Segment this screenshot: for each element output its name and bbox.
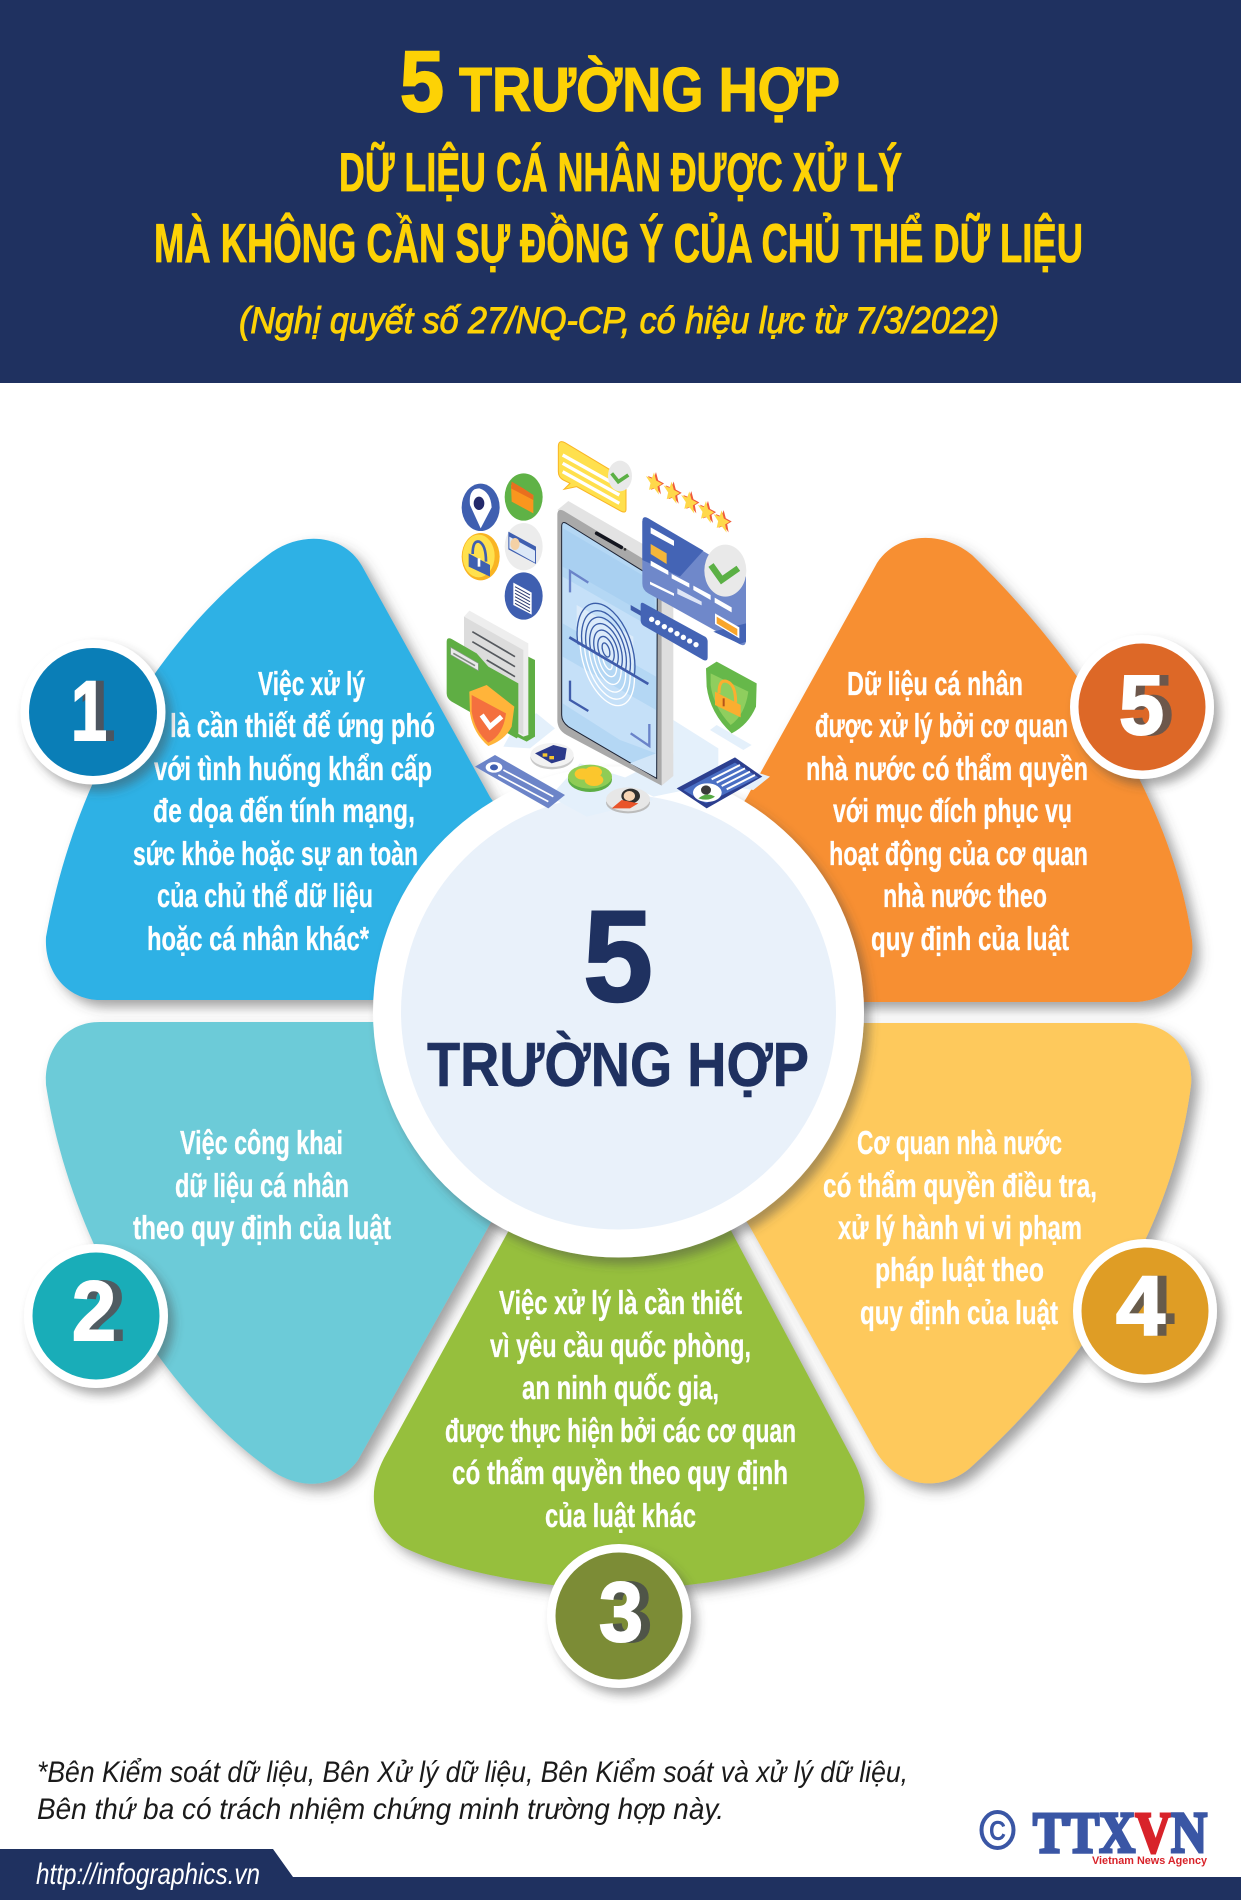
badge 4	[1073, 1239, 1217, 1383]
chat bubble	[558, 442, 632, 512]
phone body	[557, 501, 673, 786]
round icon: lock	[462, 533, 500, 580]
petal 3 text: được thực hiện bởi các cơ quan	[445, 1412, 796, 1449]
illustration: phone with data icons	[447, 442, 770, 817]
wordmark: TTXVN	[1033, 1800, 1207, 1865]
round icon: folder	[505, 473, 543, 521]
scan brackets	[570, 571, 649, 746]
logo: TTXVN	[982, 1800, 1208, 1867]
bottom icon: person disc	[606, 787, 650, 813]
petal 2 shape	[46, 1022, 520, 1484]
green shield with lock	[706, 662, 757, 733]
petal 5 text: với mục đích phục vụ	[833, 792, 1072, 829]
petal 2 text	[133, 1124, 391, 1246]
petal 1 text: của chủ thể dữ liệu	[157, 877, 373, 914]
central circle	[373, 766, 864, 1258]
petal 3 text: vì yêu cầu quốc phòng,	[490, 1327, 751, 1364]
badge 2	[24, 1244, 168, 1388]
petal 1 text: đe dọa đến tính mạng,	[153, 792, 415, 829]
central number: 5	[583, 883, 653, 1029]
petal 5 text: nhà nước theo	[883, 877, 1047, 914]
round icon: location	[462, 484, 500, 531]
folder with document	[447, 611, 535, 742]
subtitle: (Nghị quyết số 27/NQ-CP, có hiệu lực từ 7/3/2022)	[239, 300, 999, 341]
petal 5 text: quy định của luật	[871, 920, 1069, 957]
agency name: Vietnam News Agency	[1092, 1855, 1208, 1867]
badge 3: 3	[599, 1565, 643, 1659]
central label: TRƯỜNG HỢP	[427, 1031, 809, 1100]
petal 3 text	[445, 1284, 796, 1534]
badge 1	[20, 640, 166, 784]
footnote: *Bên Kiểm soát dữ liệu, Bên Xử lý dữ liệu, Bên Kiểm soát và xử lý dữ liệu,	[37, 1756, 908, 1789]
petal 5 text	[806, 665, 1088, 957]
petal 1 shape	[46, 539, 520, 1000]
website url: http://infographics.vn	[36, 1858, 260, 1891]
petal 5 text: Dữ liệu cá nhân	[847, 665, 1023, 702]
petal 5 text: nhà nước có thẩm quyền	[806, 750, 1088, 787]
round icon: document	[505, 572, 543, 620]
petal 4 text: Cơ quan nhà nước	[857, 1124, 1062, 1161]
password bar	[631, 603, 708, 660]
title line 1: 5	[400, 34, 444, 130]
bottom icon: house disc	[530, 743, 574, 769]
badge 5: 5	[1128, 658, 1173, 752]
petal 1 text	[133, 665, 435, 957]
header banner	[0, 0, 1241, 383]
petal 1 text: là cần thiết để ứng phó	[170, 707, 435, 744]
petal 3 text: Việc xử lý là cần thiết	[499, 1284, 742, 1321]
petal 4 text: có thẩm quyền điều tra,	[823, 1167, 1097, 1204]
badge 1: 1	[71, 664, 107, 758]
badge 3: 3	[608, 1565, 652, 1659]
petal 4 shape	[720, 1023, 1191, 1483]
petal 1 text: hoặc cá nhân khác*	[147, 920, 369, 957]
copyright mark	[982, 1812, 1014, 1848]
bottom icon: coins disc	[568, 765, 612, 792]
petal 3 text: của luật khác	[545, 1497, 696, 1534]
bottom icon: profile bar	[475, 755, 565, 808]
petal 4 text	[823, 1124, 1097, 1331]
copyright mark: C	[989, 1815, 1006, 1846]
badge 5: 5	[1119, 658, 1164, 752]
petal 1 text: Việc xử lý	[258, 665, 365, 702]
petal 4 text: quy định của luật	[860, 1294, 1058, 1331]
badge 2: 2	[81, 1264, 125, 1358]
petal 3 shape	[374, 1210, 865, 1590]
petal 3 text: an ninh quốc gia,	[522, 1369, 719, 1406]
title line 2: DỮ LIỆU CÁ NHÂN ĐƯỢC XỬ LÝ	[339, 141, 902, 203]
petal 4 text: xử lý hành vi vi phạm	[838, 1209, 1082, 1246]
petal 2 text: dữ liệu cá nhân	[175, 1167, 349, 1204]
petal 5 text: hoạt động của cơ quan	[829, 835, 1088, 872]
petal 1 text: sức khỏe hoặc sự an toàn	[133, 835, 418, 872]
bottom icon: id card	[677, 757, 762, 808]
check badge on card	[704, 545, 746, 597]
round icon: id card	[505, 523, 543, 570]
badge 4: 4	[1125, 1259, 1174, 1353]
orange shield	[469, 685, 514, 746]
petal 3 text: có thẩm quyền theo quy định	[452, 1454, 788, 1491]
petal 5 text: được xử lý bởi cơ quan	[815, 707, 1068, 744]
fingerprint	[568, 602, 649, 706]
petal 1 text: với tình huống khẩn cấp	[154, 750, 432, 787]
floor shadows	[503, 713, 770, 817]
badge 4: 4	[1116, 1259, 1165, 1353]
footer bar	[0, 1849, 1241, 1900]
rating stars	[646, 467, 732, 535]
petal 4 text: pháp luật theo	[875, 1251, 1044, 1288]
badge 1: 1	[79, 664, 115, 758]
petal 5 shape	[720, 538, 1192, 1002]
title line 1	[400, 34, 840, 130]
title line 1: TRƯỜNG HỢP	[459, 56, 840, 125]
footnote	[37, 1756, 908, 1826]
petal 2 text: Việc công khai	[180, 1124, 343, 1161]
badge 5	[1070, 635, 1214, 779]
petal 2 text: theo quy định của luật	[133, 1209, 391, 1246]
footnote: Bên thứ ba có trách nhiệm chứng minh trường hợp này.	[37, 1793, 724, 1826]
badge 2: 2	[72, 1264, 116, 1358]
credit card	[642, 517, 746, 645]
badge 3	[547, 1544, 691, 1688]
